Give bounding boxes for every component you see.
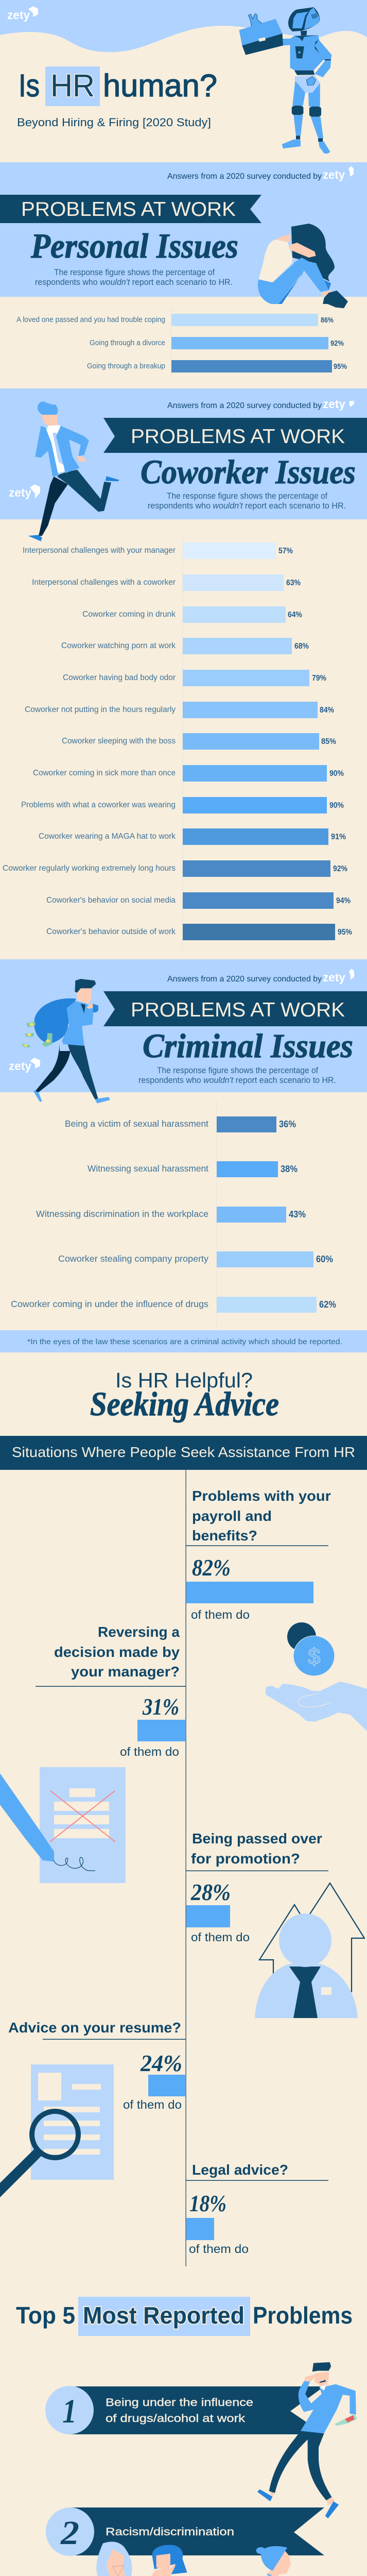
card: passed over for promotion — [186, 1831, 328, 1944]
survey credit: Answers from a 2020 survey conducted by — [167, 172, 322, 181]
logo: zety — [9, 484, 40, 499]
description: The response figure shows the percentage of — [157, 1065, 318, 1075]
ribbon 1: Being under the influence — [106, 2397, 253, 2409]
description: respondents who wouldn't report each scenario to HR. — [138, 1075, 336, 1085]
bar row 11: Coworker regularly working extremely long hours — [3, 864, 176, 873]
card: passed over for promotion: 28% — [190, 1879, 231, 1905]
bar row 12 — [46, 892, 351, 909]
bar row 5: Coworker coming in under the influence of drugs — [11, 1299, 208, 1309]
logo: zety: zety — [9, 486, 31, 499]
ribbon 2: Racism/discrimination — [106, 2526, 234, 2538]
icon: three women gossiping — [78, 2541, 291, 2576]
logo: zety — [7, 6, 38, 22]
icon: running man — [28, 401, 119, 541]
card: advice on resume — [8, 2020, 186, 2111]
bar row 4 — [61, 638, 309, 654]
banner: PROBLEMS AT WORK — [131, 426, 345, 448]
bar: breakup — [87, 360, 347, 372]
bar row 6: Coworker not putting in the hours regularly — [25, 705, 176, 714]
card: legal advice: of them do — [189, 2242, 249, 2256]
card: advice on resume: 24% — [140, 2050, 182, 2076]
bar row 1: 36% — [279, 1119, 296, 1129]
bar row 9: 90% — [329, 801, 344, 810]
card: reversing a decision: your manager? — [71, 1664, 180, 1680]
bar row 5: 62% — [319, 1299, 336, 1310]
card: advice on resume: Advice on your resume? — [8, 2020, 181, 2036]
icon: sad woman sitting — [258, 224, 348, 308]
heading: top 5: Problems — [253, 2302, 353, 2329]
bar row 8 — [33, 765, 344, 782]
title: human? — [103, 68, 217, 103]
panel: coworker issues header — [0, 388, 367, 519]
band: situations — [0, 1436, 367, 1470]
bar row 5: Coworker having bad body odor — [63, 673, 176, 682]
bar row 2: Witnessing sexual harassment — [88, 1163, 208, 1174]
card: reversing a decision: of them do — [120, 1745, 179, 1758]
bar row 10: Coworker wearing a MAGA hat to work — [39, 832, 176, 841]
card: reversing a decision: decision made by — [54, 1644, 180, 1660]
card: payroll: 82% — [192, 1555, 231, 1581]
logo: zety: zety — [7, 8, 30, 22]
bar row 11 — [3, 860, 347, 877]
bar row 2 — [88, 1161, 298, 1177]
bar row 8: Coworker coming in sick more than once — [33, 769, 176, 777]
footnote band — [0, 1330, 367, 1352]
bar row 4: Coworker watching porn at work — [61, 641, 176, 650]
card: reversing a decision: Reversing a — [98, 1624, 180, 1640]
bar row 2: 38% — [281, 1164, 298, 1174]
survey credit: zety — [323, 397, 345, 411]
banner — [103, 991, 367, 1026]
icon: coin over hand: $ — [308, 1644, 320, 1669]
bar row 2 — [32, 574, 301, 591]
heading: is HR helpful: Is HR Helpful? — [115, 1368, 253, 1392]
card: payroll: Problems with your — [192, 1488, 331, 1504]
bar row 5: 79% — [312, 674, 326, 683]
bar row 2: 63% — [286, 579, 301, 587]
bar row 9 — [21, 797, 344, 814]
footnote band: *In the eyes of the law these scenarios are a criminal activity which should be reported. — [27, 1338, 342, 1346]
icon: man with money bag — [22, 979, 110, 1104]
icon: drunk man — [257, 2362, 357, 2518]
bar row 13: 95% — [338, 928, 352, 937]
survey credit — [167, 166, 354, 181]
bar row 6: 84% — [320, 706, 334, 715]
heading: top 5: Most Reported — [83, 2302, 244, 2329]
chart: coworker issues — [3, 535, 352, 949]
bar: divorce: Going through a divorce — [90, 339, 165, 347]
bar row 12: 94% — [336, 896, 351, 905]
bar row 4 — [58, 1251, 333, 1267]
description: The response figure shows the percentage of — [54, 267, 215, 277]
bar row 1: Being a victim of sexual harassment — [65, 1118, 208, 1129]
bar row 4: 68% — [294, 642, 309, 651]
bar row 3: Witnessing discrimination in the workplace — [36, 1209, 208, 1219]
survey credit: zety — [323, 971, 345, 984]
bar row 5 — [63, 670, 326, 686]
bar row 3 — [36, 1207, 306, 1223]
ribbon 2: 2 — [60, 2514, 79, 2552]
card: passed over for promotion: of them do — [191, 1930, 250, 1944]
bar: divorce — [90, 337, 344, 349]
bar row 7: 85% — [321, 737, 336, 746]
bar row 10 — [39, 828, 346, 845]
bar row 12: Coworker's behavior on social media — [46, 896, 176, 905]
ribbon 1: 1 — [62, 2393, 77, 2430]
bar row 1 — [23, 543, 293, 559]
survey credit — [167, 969, 354, 984]
bar: breakup: Going through a breakup — [87, 362, 165, 370]
survey credit: zety — [323, 168, 345, 181]
banner — [103, 418, 367, 453]
bar row 5 — [11, 1297, 336, 1313]
bar row 3: 64% — [288, 611, 302, 619]
bar row 3: Coworker coming in drunk — [82, 610, 176, 619]
ribbon 1 — [45, 2386, 324, 2434]
description: respondents who wouldn't report each scenario to HR. — [148, 501, 346, 511]
bar row 8: 90% — [329, 769, 344, 778]
heading: Coworker Issues — [141, 453, 356, 491]
description — [148, 491, 346, 511]
chart: personal issues — [16, 309, 347, 378]
bar row 3 — [82, 606, 302, 623]
bar row 10: 91% — [331, 833, 346, 841]
bar row 13: Coworker's behavior outside of work — [46, 927, 176, 936]
bar: loved one passed: A loved one passed and you had trouble coping — [16, 316, 165, 324]
chart: criminal issues — [11, 1101, 336, 1330]
card: payroll — [186, 1488, 331, 1621]
survey credit — [167, 397, 354, 411]
description: respondents who wouldn't report each scenario to HR. — [35, 277, 233, 287]
subtitle: Beyond Hiring & Firing [2020 Study] — [17, 116, 211, 129]
card: reversing a decision — [36, 1624, 186, 1758]
card: passed over for promotion: Being passed over — [192, 1831, 322, 1846]
card: passed over for promotion: for promotion? — [191, 1851, 300, 1867]
card: advice on resume: of them do — [123, 2098, 182, 2111]
card: reversing a decision: 31% — [142, 1694, 179, 1720]
card: payroll: payroll and — [192, 1508, 272, 1524]
bar: loved one passed: 86% — [321, 316, 334, 325]
central vertical divider — [185, 1470, 186, 2266]
band: situations: Situations Where People Seek Assistance From HR — [12, 1444, 355, 1460]
panel: personal issues header — [0, 162, 367, 297]
bar row 6 — [25, 702, 334, 718]
ribbon 1: of drugs/alcohol at work — [106, 2413, 246, 2425]
bar: breakup: 95% — [334, 363, 347, 371]
heading: Criminal Issues — [143, 1027, 353, 1065]
banner: PROBLEMS AT WORK — [21, 198, 236, 221]
heading: top 5: Top 5 — [16, 2302, 75, 2329]
bar row 9: Problems with what a coworker was wearing — [21, 801, 176, 809]
bar row 7: Coworker sleeping with the boss — [62, 737, 176, 745]
heading: seeking advice: Seeking Advice — [90, 1385, 279, 1423]
card: legal advice: Legal advice? — [192, 2162, 288, 2178]
icon: resume with magnifier — [0, 2064, 114, 2197]
title — [19, 66, 217, 106]
description — [138, 1065, 336, 1085]
ribbon 2 — [46, 2507, 324, 2556]
panel: hero — [0, 0, 367, 162]
bar row 7 — [62, 733, 336, 750]
heading: Personal Issues — [30, 226, 238, 265]
description: The response figure shows the percentage of — [167, 491, 327, 501]
bar row 13 — [46, 924, 352, 940]
bar row 1: Interpersonal challenges with your manager — [23, 546, 176, 555]
bar: divorce: 92% — [330, 340, 344, 348]
icon: coin over hand — [266, 1622, 367, 1731]
logo: zety — [9, 1058, 40, 1073]
description — [35, 267, 233, 287]
icon: robot with briefcase — [239, 7, 331, 154]
panel: criminal issues header — [0, 959, 367, 1092]
icon: person with arrows — [255, 1883, 364, 2018]
bar row 3: 43% — [289, 1209, 306, 1219]
bar row 11: 92% — [333, 865, 347, 873]
survey credit: Answers from a 2020 survey conducted by — [167, 975, 322, 984]
title: HR — [50, 68, 95, 103]
survey credit: Answers from a 2020 survey conducted by — [167, 401, 322, 410]
card: payroll: benefits? — [192, 1528, 257, 1544]
heading: top 5 — [16, 2297, 353, 2336]
title: Is — [19, 68, 40, 103]
bar row 1 — [65, 1116, 296, 1132]
bar row 4: 60% — [316, 1254, 333, 1264]
card: payroll: of them do — [191, 1608, 250, 1621]
card: legal advice — [186, 2162, 328, 2256]
bar row 2: Interpersonal challenges with a coworker — [32, 578, 176, 587]
bar row 4: Coworker stealing company property — [58, 1253, 208, 1264]
banner — [0, 195, 261, 223]
banner: PROBLEMS AT WORK — [131, 999, 345, 1021]
bar: loved one passed — [16, 314, 334, 326]
logo: zety: zety — [9, 1059, 31, 1073]
bar row 1: 57% — [278, 547, 293, 555]
card: legal advice: 18% — [189, 2191, 226, 2216]
icon: crossed out document with pen — [0, 1767, 126, 1883]
